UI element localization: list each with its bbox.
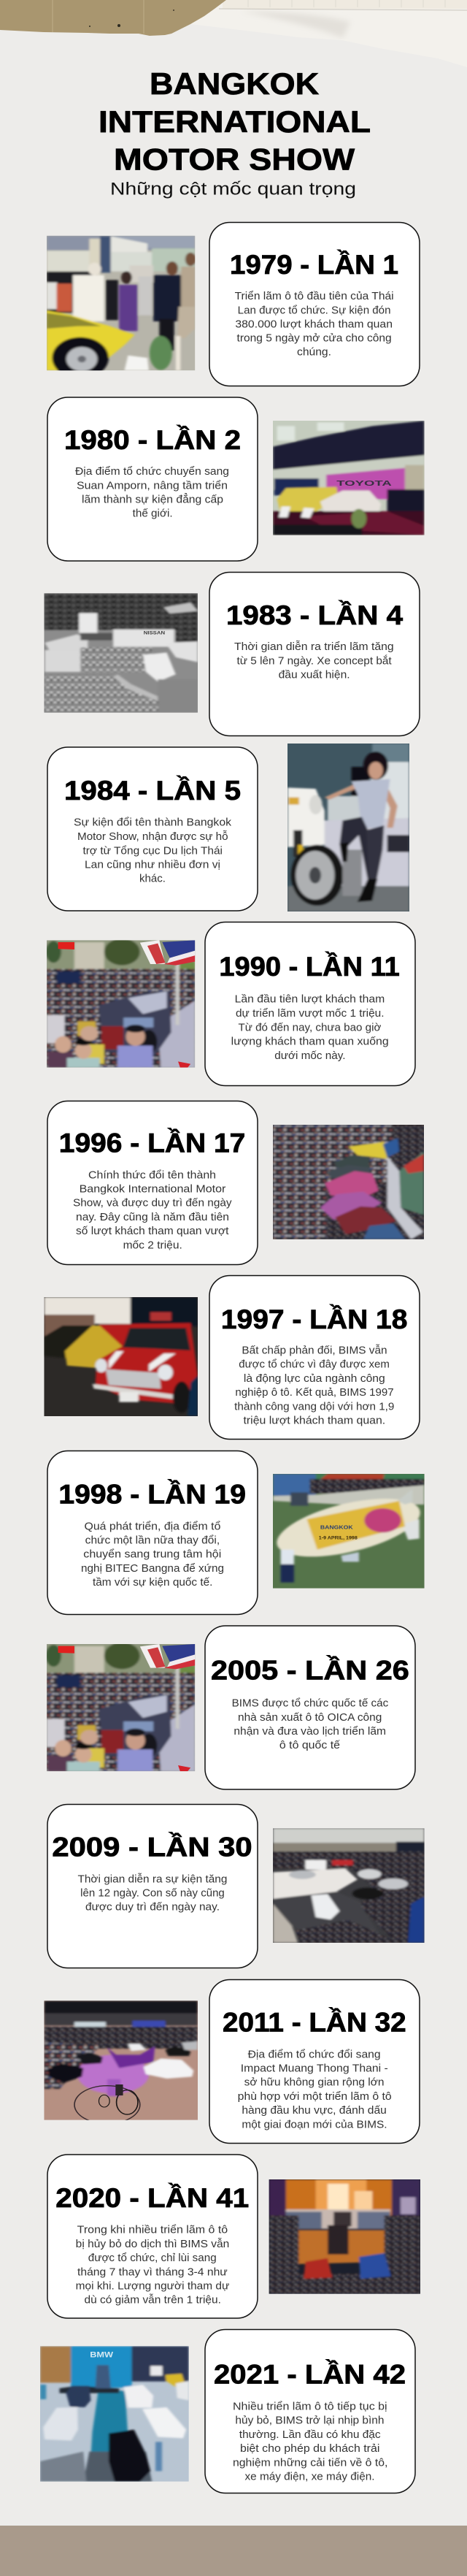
description: xe máy điện, xe máy điện.: [245, 2471, 375, 2483]
description: 380.000 lượt khách tham quan: [235, 319, 393, 331]
description: là động lực của ngành công: [244, 1373, 385, 1385]
photo: 1980 Toyota booth: TOYOTA: [336, 480, 392, 488]
description: Suan Amporn, nâng tầm triển: [77, 480, 228, 492]
card panel: [205, 2330, 415, 2493]
title: INTERNATIONAL: [99, 104, 371, 139]
heading: 1984 - LẦN 5: [64, 776, 241, 806]
description: chuyển sang trung tâm hội: [83, 1549, 221, 1561]
description: nghiệp ô tô. Kết quả, BIMS 1997: [235, 1387, 394, 1399]
description: [73, 1169, 232, 1251]
description: tháng 7 thay vì tháng 3-4 như: [77, 2266, 228, 2278]
description: chúng.: [297, 347, 331, 359]
description: Triển lãm ô tô đầu tiên của Thái: [235, 291, 394, 302]
description: lên 12 ngày. Con số này cũng: [80, 1888, 225, 1900]
description: mọi khi. Lượng người tham dự: [76, 2280, 230, 2292]
description: trong 5 ngày mở cửa cho công: [236, 333, 392, 345]
heading: 1998 - LẦN 19: [58, 1479, 246, 1509]
heading: 1983 - LẦN 4: [226, 600, 403, 630]
description: Lần đầu tiên lượt khách tham: [235, 994, 385, 1006]
description: Địa điểm tổ chức đổi sang: [248, 2049, 381, 2060]
photo: 2021 BMW hall: BMW: [90, 2350, 114, 2359]
footer band: [0, 2526, 467, 2576]
description: Sự kiện đổi tên thành Bangkok: [74, 817, 232, 829]
white paper sheet: [190, 0, 467, 67]
description: triệu lượt khách tham quan.: [244, 1415, 385, 1426]
description: chức một lần nữa thay đổi,: [85, 1535, 220, 1547]
description: Motor Show, nhận được sự hỗ: [77, 830, 228, 843]
heading: 2020 - LẦN 41: [55, 2183, 249, 2213]
photo: 2005 crowd with flags: [47, 1644, 196, 1772]
title: MOTOR SHOW: [114, 142, 355, 177]
card: 1979 - Lần 1: [209, 222, 420, 386]
heading: 1996 - LẦN 17: [59, 1128, 245, 1158]
photo: 1998 Motor Show blimp: [273, 1474, 425, 1589]
heading: 1990 - LẦN 11: [219, 952, 400, 982]
card: 2005 - Lần 26: [205, 1626, 415, 1789]
description: hàng đầu khu vực, đánh dấu: [242, 2105, 387, 2117]
description: phù hợp với một triển lãm ô tô: [238, 2091, 392, 2103]
card panel: [205, 1626, 415, 1789]
heading: 2011 - LẦN 32: [223, 2008, 406, 2038]
card panel: [47, 2155, 258, 2318]
photo: 1983 Nissan booth black and white: NISSAN: [144, 631, 165, 635]
card panel: [209, 1979, 420, 2143]
heading: 1979 - LẦN 1: [230, 250, 398, 280]
card panel: [47, 1804, 258, 1968]
description: Show, và được duy trì đến ngày: [73, 1198, 232, 1209]
photo: 1979 royal visit with yellow car: [47, 235, 196, 371]
description: dự triển lãm vượt mốc 1 triệu.: [236, 1008, 384, 1020]
card: 1983 - Lần 4: [209, 573, 420, 736]
card panel: [209, 222, 420, 386]
photo: 1983 Nissan booth black and white: [44, 593, 198, 713]
description: được tổ chức, chỉ lùi sang: [88, 2252, 217, 2264]
description: đầu xuất hiện.: [279, 669, 350, 681]
description: hủy bỏ, BIMS trở lại nhịp bình: [235, 2415, 384, 2427]
subtitle: Những cột mốc quan trọng: [110, 180, 356, 199]
photo: 1998 Motor Show blimp: 1-9 APRIL, 1998: [319, 1534, 358, 1540]
description: Lan được tổ chức. Sự kiện đón: [238, 305, 391, 316]
description: Thời gian diễn ra sự kiện tăng: [77, 1873, 227, 1885]
description: dưới mốc này.: [274, 1050, 346, 1062]
card: 2011 - Lần 32: [209, 1979, 420, 2143]
description: [77, 1873, 227, 1914]
description: nhà sản xuất ô tô OICA công: [238, 1712, 382, 1724]
card: 1990 - Lần 11: [205, 922, 415, 1085]
card: 1997 - Lần 18: [209, 1275, 420, 1439]
heading: 1997 - LẦN 18: [221, 1304, 407, 1334]
description: sở hữu không gian rộng lớn: [244, 2077, 384, 2089]
description: Địa điểm tổ chức chuyển sang: [75, 466, 229, 478]
card panel: [47, 1101, 258, 1265]
description: nhận và đưa vào lịch triển lãm: [234, 1726, 386, 1738]
description: [74, 817, 232, 884]
card panel: [209, 1275, 420, 1439]
description: được tổ chức vì đây được xem: [239, 1359, 390, 1371]
description: [238, 2049, 392, 2130]
card: 1980 - Lần 2: [47, 397, 258, 561]
description: Từ đó đến nay, chưa bao giờ: [238, 1022, 382, 1033]
description: Nhiều triển lãm ô tô tiếp tục bị: [233, 2401, 387, 2412]
description: trợ từ Tổng cục Du lịch Thái: [83, 845, 223, 857]
description: mốc 2 triệu.: [123, 1239, 182, 1251]
header: torn paper decoration: [0, 0, 467, 67]
card panel: [209, 573, 420, 736]
description: [231, 994, 389, 1062]
photo: 2021 BMW hall: [40, 2346, 189, 2482]
kraft paper: [0, 0, 226, 36]
grid paper strip: [219, 0, 467, 10]
description: nghiệm những cải tiến về ô tô,: [233, 2457, 387, 2469]
title: BANGKOK: [150, 66, 319, 101]
description: một giai đoạn mới của BIMS.: [242, 2119, 387, 2130]
description: khác.: [139, 873, 166, 884]
title: [99, 66, 371, 177]
description: bị hủy bỏ do dịch thì BIMS vẫn: [76, 2238, 229, 2250]
description: dù có giảm vẫn trên 1 triệu.: [85, 2294, 221, 2306]
card: 1998 - Lần 19: [47, 1451, 258, 1614]
description: nay. Đây cũng là năm đầu tiên: [76, 1212, 229, 1223]
description: Trong khi nhiều triển lãm ô tô: [77, 2225, 228, 2236]
description: từ 5 lên 7 ngày. Xe concept bắt: [236, 654, 392, 667]
description: thế giới.: [133, 508, 173, 519]
heading: 2005 - LẦN 26: [211, 1655, 409, 1685]
card panel: [47, 747, 258, 911]
description: [81, 1521, 224, 1589]
description: Bất chấp phản đối, BIMS vẫn: [242, 1344, 387, 1356]
photo: 1990 crowd with flags: [47, 940, 196, 1068]
description: [234, 641, 394, 681]
card: 2009 - Lần 30: [47, 1804, 258, 1968]
card panel: [47, 1451, 258, 1614]
card panel: [47, 397, 258, 561]
photo: 1984 model with motorcycle: [287, 744, 409, 911]
heading: 1980 - LẦN 2: [64, 425, 241, 455]
description: biệt cho phép du khách trải: [240, 2443, 379, 2455]
description: [234, 1344, 394, 1426]
description: Chính thức đổi tên thành: [88, 1169, 216, 1181]
photo: 2009 Mercedes stage: [273, 1828, 425, 1943]
card panel: [205, 922, 415, 1085]
photo: 1996 crowd with colourful Beetles: [273, 1125, 424, 1239]
description: lượng khách tham quan xuống: [231, 1036, 389, 1048]
card: 2021 - Lần 42: [205, 2330, 415, 2493]
description: Quá phát triển, địa điểm tổ: [85, 1521, 220, 1532]
description: thường. Lần đầu có khu đặc: [239, 2429, 381, 2441]
heading: 2009 - LẦN 30: [52, 1832, 252, 1862]
heading: 2021 - LẦN 42: [214, 2359, 406, 2389]
description: số lượt khách tham quan vượt: [76, 1226, 229, 1237]
description: Lan cũng như nhiều đơn vị: [85, 859, 220, 871]
photo: 1997 red Mini: [44, 1297, 198, 1416]
description: [76, 2225, 230, 2306]
description: thành công vang dội với hơn 1,9: [234, 1401, 394, 1413]
card: 1996 - Lần 17: [47, 1101, 258, 1265]
description: lãm thành sự kiện đẳng cấp: [82, 492, 223, 505]
description: [75, 466, 229, 519]
description: Thời gian diễn ra triển lãm tăng: [234, 641, 394, 653]
description: Impact Muang Thong Thani -: [241, 2063, 388, 2075]
description: [235, 291, 394, 359]
description: tầm với sự kiện quốc tế.: [93, 1577, 212, 1589]
description: BIMS được tổ chức quốc tế các: [232, 1698, 388, 1710]
photo: 1998 Motor Show blimp: BANGKOK: [320, 1524, 353, 1530]
description: Bangkok International Motor: [80, 1184, 226, 1196]
description: [233, 2401, 387, 2483]
card: 1984 - Lần 5: [47, 747, 258, 911]
description: [232, 1698, 388, 1751]
card: 2020 - Lần 41: [47, 2155, 258, 2318]
photo: 1980 Toyota booth: [273, 421, 425, 535]
description: được duy trì đến ngày nay.: [85, 1902, 220, 1914]
photo: 2011 stage with purple lights: [44, 2000, 198, 2120]
photo: 2020 orange stage show: [269, 2179, 420, 2294]
description: ô tô quốc tế: [279, 1740, 340, 1751]
description: nghị BITEC Bangna để xứng: [81, 1563, 224, 1575]
